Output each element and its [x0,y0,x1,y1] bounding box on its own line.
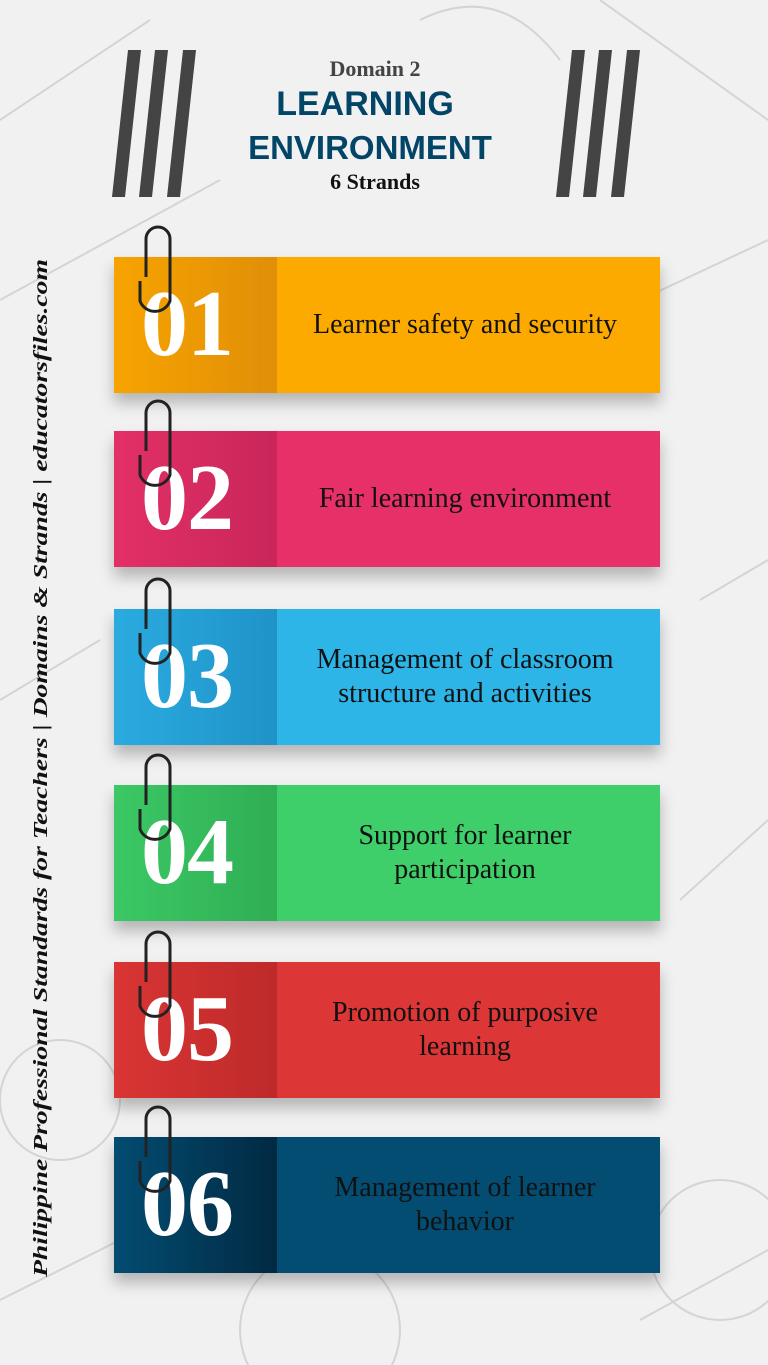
card 01 [114,257,660,393]
icon: paperclip [138,930,172,1018]
card 02 [114,431,660,567]
card 03: 03 [141,624,233,728]
card 01: 01 [141,272,233,376]
card 04: Support for learner [358,820,572,851]
title block [248,56,492,194]
card 02: Fair learning environment [319,483,611,514]
icon: paperclip [138,578,172,665]
title block: LEARNING [276,85,454,123]
card 02: 02 [141,446,233,550]
card 05: learning [419,1031,511,1062]
card 04: 04 [141,800,233,904]
card 06: behavior [416,1206,514,1237]
decorative bars left [112,50,196,197]
icon: paperclip [138,226,172,313]
card 03: Management of classroom [316,644,614,675]
card 06 [114,1137,660,1273]
title block: 6 Strands [330,169,420,194]
card 01: Learner safety and security [313,309,617,340]
card 06: 06 [141,1152,233,1256]
card 05: Promotion of purposive [332,997,598,1028]
icon: paperclip [138,754,172,841]
icon: paperclip [138,1106,172,1193]
card 04 [114,785,660,921]
card 05: 05 [141,977,233,1081]
title block: ENVIRONMENT [248,129,492,166]
side vertical text: Philippine Professional Standards for Teachers | Domains & Strands | educatorsfiles.com [30,259,52,1278]
card 03 [114,609,660,745]
title block: Domain 2 [329,56,421,81]
card 05 [114,962,660,1098]
icon: paperclip [138,400,172,487]
decorative bars right [556,50,640,197]
card 03: structure and activities [338,678,592,709]
card 04: participation [394,854,536,885]
card 06: Management of learner [334,1172,596,1203]
